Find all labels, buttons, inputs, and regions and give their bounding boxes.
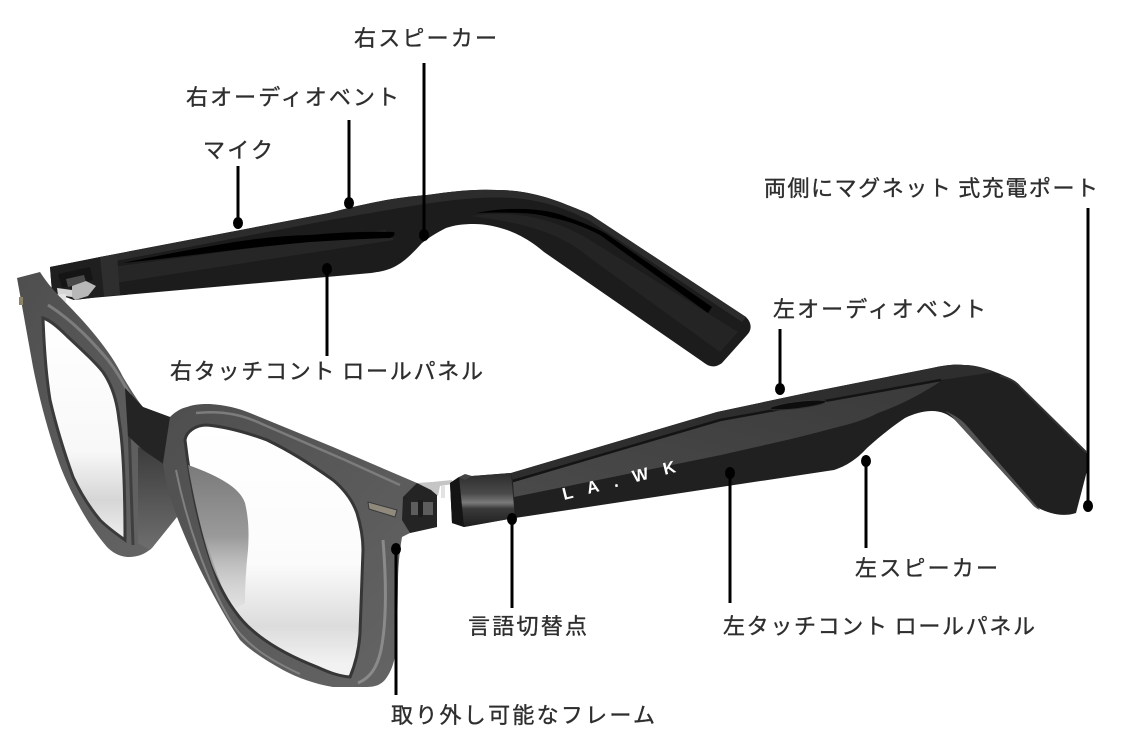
left nose pad (138, 447, 176, 550)
right lens (185, 425, 363, 677)
left temple light panel (513, 381, 941, 497)
left temple arm (450, 365, 1089, 527)
right temple arm (50, 190, 751, 366)
callout: left speaker: 左スピーカー (855, 556, 998, 581)
right upper slot (123, 232, 394, 263)
left rivet (19, 297, 23, 305)
left lens frame (17, 272, 178, 557)
right hinge plate (368, 502, 397, 517)
callout: right audio vent: 右オーディオベント (186, 85, 399, 110)
left temple upper band (511, 365, 995, 481)
callout: right speaker: 右スピーカー (354, 26, 497, 51)
left temple inner edge (945, 411, 1040, 510)
right nose pad (188, 465, 249, 608)
silver hinge pin (417, 480, 453, 496)
callout: left speaker (855, 455, 998, 581)
callout: language switch point (468, 513, 587, 639)
callout: magnetic charging port: 両側にマグネット 式充電ポート (764, 176, 1098, 201)
right hinge block (402, 483, 437, 533)
right lens frame (163, 404, 453, 687)
brand mark: L A . W K (560, 457, 678, 504)
callout: magnetic charging port (764, 176, 1098, 512)
callout: right speaker (354, 26, 497, 241)
right silver hinge (72, 281, 96, 300)
callout: microphone: マイク (203, 138, 273, 163)
callout: microphone (203, 138, 273, 229)
callout: right audio vent (186, 85, 399, 209)
right temple end joint (50, 257, 104, 300)
callout: right touch panel: 右タッチコント ロールパネル (170, 359, 483, 384)
callout: removable frame: 取り外し可能なフレーム (391, 703, 655, 728)
callout: removable frame (391, 543, 655, 728)
left audio vent (770, 398, 826, 412)
left temple cap (459, 473, 515, 527)
callout: left touch panel: 左タッチコント ロールパネル (723, 614, 1035, 639)
right far slot (476, 209, 712, 313)
callout: left audio vent (773, 297, 986, 395)
callout: right touch panel (170, 263, 483, 384)
callout: left touch panel (723, 467, 1035, 639)
left lens (43, 318, 125, 540)
bridge (125, 388, 187, 465)
callout: language switch point: 言語切替点 (468, 614, 587, 639)
callout: left audio vent: 左オーディオベント (773, 297, 986, 322)
